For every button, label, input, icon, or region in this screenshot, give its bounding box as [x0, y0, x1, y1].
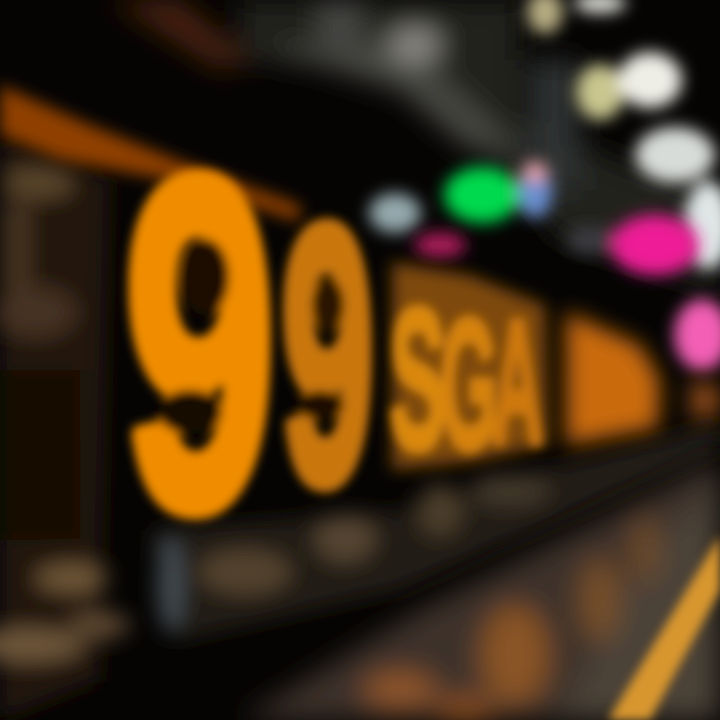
block: far orange sign section	[566, 312, 720, 445]
background: upper structure	[110, 0, 720, 290]
digit: second 9: 9	[281, 152, 374, 559]
letters: S G A: A	[492, 284, 543, 480]
letters: S G A	[390, 267, 543, 491]
counter: dark hole of large 9	[181, 239, 229, 315]
wall: brown textured panel on the left	[0, 140, 130, 720]
letters: S G A: G	[440, 280, 498, 487]
counter: dark hole of second 9	[312, 278, 344, 332]
counter: dark gap in hook of large 9	[158, 390, 222, 434]
light: green	[369, 161, 552, 233]
orange streak	[0, 85, 300, 222]
backing: orange glow behind letters	[392, 262, 548, 470]
digit: large 9: 9	[124, 82, 276, 606]
sign: neon digits	[124, 82, 720, 606]
light: magenta	[414, 215, 720, 371]
ledge: brown lower edge of the sign	[150, 420, 720, 640]
light: white cluster top right	[527, 0, 720, 269]
letters: S G A: S	[390, 267, 446, 491]
counter: dark gap in hook of second 9	[296, 391, 344, 419]
neon blobs: green, white and magenta lights	[369, 0, 720, 371]
street: wet floor with reflections	[240, 460, 720, 720]
street: orange lane line	[608, 535, 720, 720]
text: blurred sign letters	[390, 262, 548, 491]
